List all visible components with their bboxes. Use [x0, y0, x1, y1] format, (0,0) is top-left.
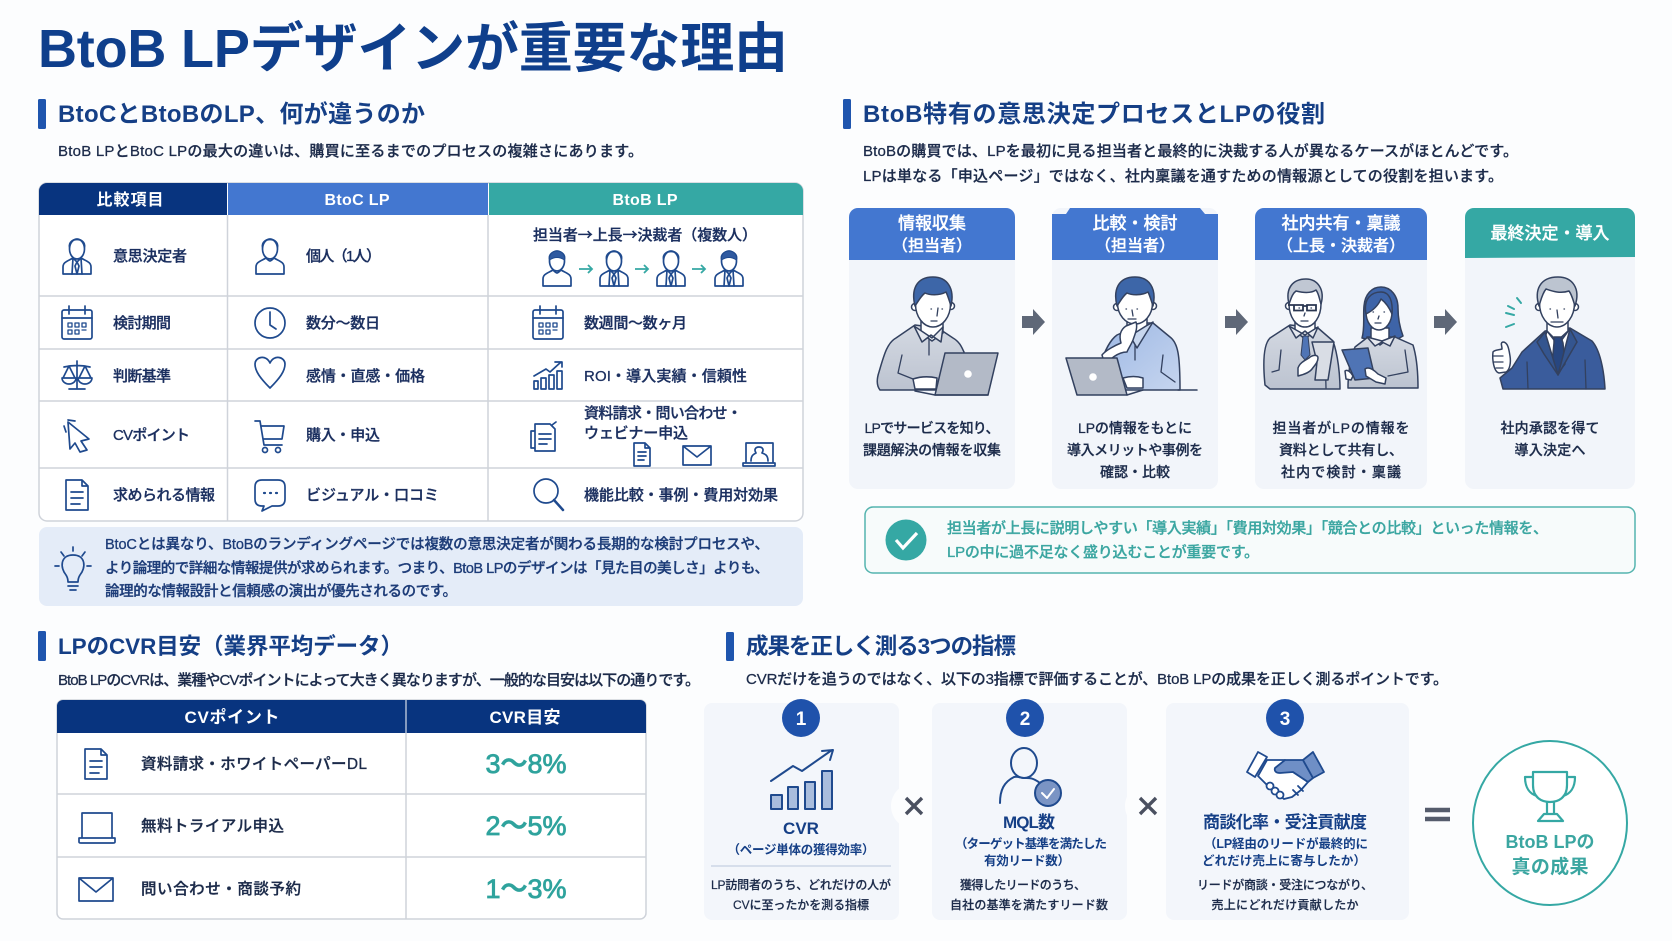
table header: BtoC LP: [228, 183, 488, 215]
row: decision maker: [63, 224, 757, 286]
process intro text: BtoBの購買では、LPを最初に見る担当者と最終的に決裁する人が異なるケースがほとんどです。: [863, 142, 1518, 160]
step 2 card: [1052, 208, 1218, 489]
step 4 card: 社内承認を得て: [1500, 420, 1600, 436]
metric card 2: MQL: 自社の基準を満たすリード数: [950, 897, 1108, 912]
row: criteria: 判断基準: [113, 368, 171, 385]
panel: decision process: [843, 99, 1635, 573]
icon: handshake: [1247, 752, 1324, 799]
panel: three metrics: [704, 632, 1627, 920]
CVR table: [57, 700, 646, 919]
row: period: 検討期間: [113, 315, 171, 332]
icons: document, mail, webinar: [634, 443, 775, 466]
operator: times 2: [1125, 783, 1171, 829]
row: decision maker: 担当者→上長→決裁者（複数人）: [533, 224, 757, 245]
metric card 1: CVR: 1: [796, 709, 807, 730]
result circle: BtoB LPの: [1506, 832, 1594, 852]
metric card 3: sales: 商談化率・受注貢献度: [1203, 812, 1367, 832]
panel: BtoC vs BtoB comparison: [38, 99, 803, 606]
row: CV point: CVポイント: [113, 427, 190, 444]
row: decision maker: 意思決定者: [113, 248, 187, 265]
step 1 card: LPでサービスを知り、: [864, 420, 1000, 436]
icon: cart: [255, 421, 284, 452]
icon: cursor: [64, 420, 89, 452]
table header: BtoB LP: [489, 183, 803, 215]
step 3 card: [1255, 208, 1427, 489]
illustration: approver thumbs up: [1493, 277, 1605, 389]
arrow 3: [1434, 309, 1457, 335]
metric card 1: CVR: [704, 699, 899, 920]
illustration: staff with laptop: [877, 277, 998, 395]
operator: equals: [1425, 810, 1450, 819]
row: period: 数分〜数日: [306, 315, 380, 332]
table header: BtoB LP: BtoB LP: [612, 192, 678, 209]
CVR table: CVR目安: [490, 708, 560, 727]
step 3 card: 担当者がLPの情報を: [1272, 420, 1410, 436]
note: BtoB summary: [39, 527, 803, 606]
note: BtoB summary: 論理的な情報設計と信頼感の演出が優先されるのです。: [105, 582, 457, 600]
table header: 比較項目: 比較項目: [96, 191, 164, 209]
metric card 3: sales: （LP経由のリードが最終的に: [1204, 836, 1368, 851]
result circle: [1473, 741, 1627, 905]
step 4 card: 最終決定・導入: [1490, 224, 1610, 243]
CVR intro text: BtoB LPのCVRは、業種やCVポイントによって大きく異なりますが、一般的な目安は以下の通りです。: [58, 671, 700, 689]
row: required info: 機能比較・事例・費用対効果: [584, 487, 778, 504]
panel: CVR benchmarks: [38, 631, 700, 919]
icon: check: [886, 520, 926, 560]
illustration: staff comparing: [1066, 277, 1197, 395]
row: inquiry: [79, 874, 566, 904]
table header: 比較項目: [39, 183, 227, 215]
step 2 card: 比較・検討: [1092, 214, 1178, 233]
heading: decision process: BtoB特有の意思決定プロセスとLPの役割: [863, 101, 1325, 128]
process intro text: [863, 142, 1518, 185]
icon: trophy: [1525, 772, 1575, 821]
step 1 card: 情報収集: [898, 214, 966, 233]
metric card 3: sales: どれだけ売上に寄与したか）: [1202, 853, 1366, 868]
CVR table: CVポイント: [184, 707, 280, 727]
step 3 card: （上長・決裁者）: [1277, 237, 1405, 255]
icon: clipboard form: [531, 422, 556, 451]
arrow 2: [1225, 309, 1248, 335]
metric card 1: CVR: LP訪問者のうち、どれだけの人が: [711, 877, 891, 892]
metric card 3: sales: [1166, 699, 1409, 920]
metric card 3: sales: 売上にどれだけ貢献したか: [1212, 897, 1358, 912]
heading: metrics: 成果を正しく測る3つの指標: [746, 634, 1016, 659]
process intro text: LPは単なる「申込ページ」ではなく、社内稟議を通すための情報源としての役割を担います。: [863, 168, 1503, 185]
note: BtoB summary: より論理的で詳細な情報提供が求められます。つまり、BtoB LPのデザインは「見た目の美しさ」よりも、: [105, 559, 769, 577]
icon: clock: [255, 308, 285, 338]
row: period: 数週間〜数ヶ月: [584, 315, 687, 332]
row: inquiry: 1〜3%: [486, 874, 566, 904]
row: whitepaper: 資料請求・ホワイトペーパーDL: [141, 755, 367, 773]
step 1 card: （担当者）: [892, 237, 972, 255]
step 4 card: [1465, 208, 1635, 489]
step 2 card: （担当者）: [1095, 237, 1175, 255]
metrics intro text: CVRだけを追うのではなく、以下の3指標で評価することが、BtoB LPの成果を正しく測るポイントです。: [746, 670, 1448, 688]
metric card 1: CVR: CVに至ったかを測る指標: [733, 897, 869, 912]
icon: light bulb: [55, 547, 91, 590]
row: CV point: 購入・申込: [306, 426, 380, 444]
step 2 card: 導入メリットや事例を: [1067, 442, 1203, 458]
metric card 2: MQL: 2: [1020, 709, 1030, 730]
row: whitepaper: [85, 749, 566, 779]
metric card 1: CVR: CVR: [783, 819, 819, 838]
metric card 2: MQL: （ターゲット基準を満たした: [955, 836, 1107, 851]
callout: key point: LPの中に過不足なく盛り込むことが重要です。: [947, 543, 1259, 561]
row: free trial: [79, 811, 566, 843]
result circle: 真の成果: [1512, 855, 1588, 878]
icon: growth chart: [534, 362, 562, 389]
step 3 card: 社内で検討・稟議: [1281, 464, 1401, 480]
callout: key point: [865, 507, 1635, 573]
row: free trial: 無料トライアル申込: [141, 817, 284, 835]
row: CV point: ウェビナー申込: [584, 425, 688, 442]
metric card 3: sales: 3: [1280, 709, 1290, 730]
row: required info: [66, 479, 778, 511]
metric card 3: sales: リードが商談・受注につながり、: [1197, 877, 1373, 892]
callout: key point: 担当者が上長に説明しやすい「導入実績」「費用対効果」「競合との比較」といった情報を、: [947, 519, 1548, 537]
row: criteria: 感情・直感・価格: [306, 367, 425, 385]
step 1 card: 課題解決の情報を収集: [863, 442, 1001, 458]
icon: magnifier: [534, 479, 563, 510]
metric card 2: MQL: MQL数: [1003, 813, 1055, 832]
heading: comparison: BtoCとBtoBのLP、何が違うのか: [58, 100, 425, 128]
step 4 card: 導入決定へ: [1514, 442, 1586, 458]
metric card 2: MQL: 有効リード数）: [984, 853, 1070, 868]
illustration: manager and colleague: [1264, 279, 1418, 389]
icon: speech bubble: [255, 480, 285, 511]
icon: growth bars: [771, 750, 833, 809]
row: inquiry: 問い合わせ・商談予約: [141, 880, 301, 898]
row: decision maker: 個人（1人）: [306, 248, 381, 265]
metric card 2: MQL: 獲得したリードのうち、: [960, 877, 1086, 892]
row: criteria: ROI・導入実績・信頼性: [584, 367, 747, 385]
comparison intro text: BtoB LPとBtoC LPの最大の違いは、購買に至るまでのプロセスの複雑さにあります。: [58, 142, 643, 160]
row: period: [62, 306, 687, 339]
operator: times 1: [891, 783, 937, 829]
step 1 card: [849, 208, 1015, 489]
row: required info: ビジュアル・口コミ: [306, 487, 439, 504]
row: free trial: 2〜5%: [486, 811, 566, 841]
approval chain icons: [543, 251, 743, 286]
step 2 card: 確認・比較: [1100, 464, 1170, 480]
step 3 card: 社内共有・稟議: [1282, 214, 1400, 233]
row: CV point: 資料請求・問い合わせ・: [584, 405, 742, 422]
note: BtoB summary: BtoCとは異なり、BtoBのランディングページでは複数の意思決定者が関わる長期的な検討プロセスや、: [105, 535, 769, 553]
heading: CVR: LPのCVR目安（業界平均データ）: [58, 633, 403, 659]
row: required info: 求められる情報: [113, 487, 215, 504]
icon: qualified person: [1000, 748, 1061, 806]
metric card 1: CVR: （ページ単体の獲得効率）: [728, 842, 874, 857]
metric card 2: MQL: [932, 699, 1127, 920]
icon: scales: [62, 361, 92, 389]
icon: heart: [255, 357, 285, 388]
arrow 1: [1022, 309, 1045, 335]
title: BtoB LPデザインが重要な理由: [38, 19, 788, 79]
step 3 card: 資料として共有し、: [1279, 442, 1403, 458]
row: CV point: [64, 405, 775, 466]
step 2 card: LPの情報をもとに: [1078, 420, 1192, 436]
table header: BtoC LP: BtoC LP: [324, 192, 390, 209]
row: whitepaper: 3〜8%: [486, 749, 566, 779]
row: criteria: [62, 357, 747, 389]
comparison table: [39, 183, 803, 521]
